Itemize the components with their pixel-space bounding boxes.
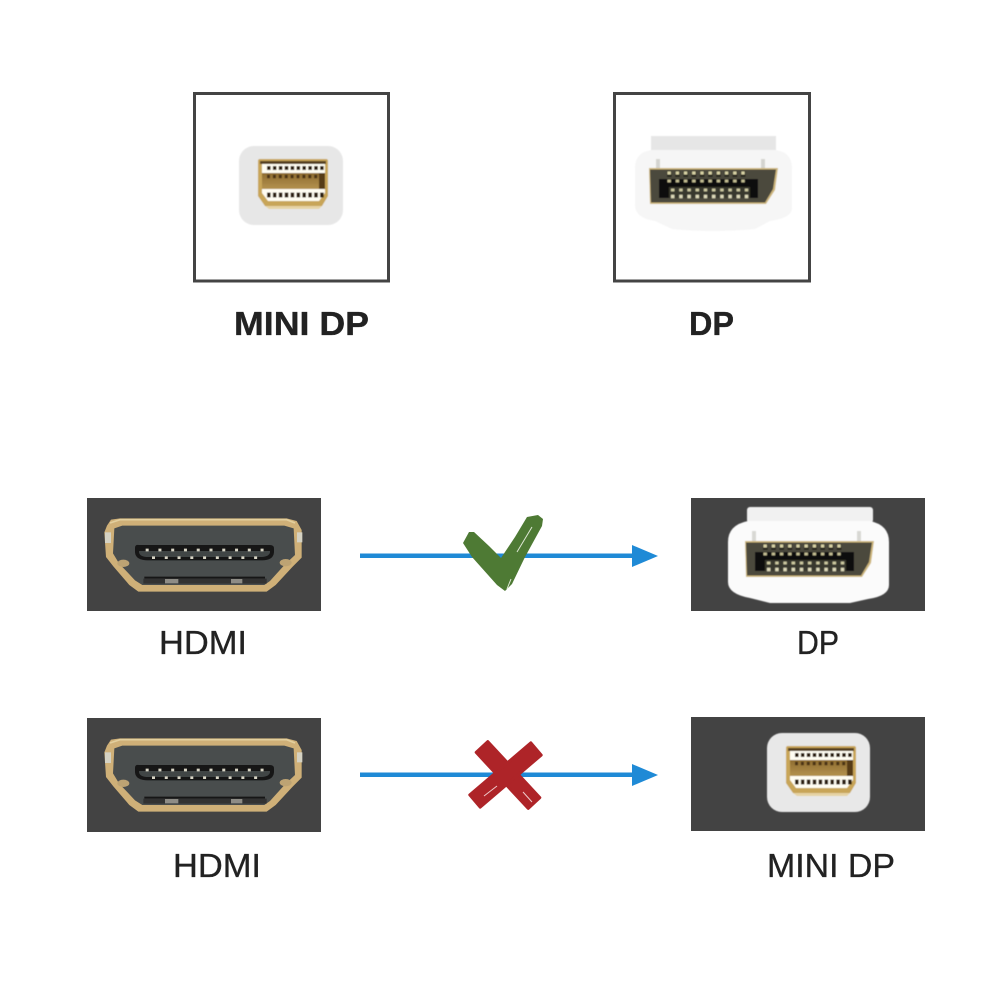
panel: DP target, row 1 — [691, 498, 925, 611]
panel: HDMI source, row 2 — [87, 718, 321, 832]
icon: Mini DP connector — [239, 146, 343, 225]
icon: HDMI port — [104, 518, 302, 592]
icon: DP port — [728, 507, 889, 603]
panel: Mini DP target, row 2 — [691, 717, 925, 831]
label: MINI DP row 2: MINI DP — [767, 847, 895, 884]
panel: Mini DP connector box — [194, 94, 388, 281]
label: HDMI row 2: HDMI — [173, 847, 261, 884]
arrow: HDMI to Mini DP — [360, 764, 658, 786]
icon: DP connector — [635, 136, 792, 231]
icon: red cross mark — [470, 742, 541, 808]
heading: MINI DP label: MINI DP — [234, 305, 369, 342]
arrow: HDMI to DP — [360, 545, 658, 567]
heading: DP label: DP — [689, 305, 734, 342]
panel: HDMI source, row 1 — [87, 498, 321, 611]
panel: DP connector box — [614, 94, 810, 281]
label: HDMI row 1: HDMI — [159, 624, 247, 661]
icon: HDMI port — [104, 738, 302, 812]
icon: green check mark — [463, 515, 543, 591]
label: DP row 1: DP — [797, 624, 839, 661]
icon: Mini DP port — [767, 733, 870, 812]
